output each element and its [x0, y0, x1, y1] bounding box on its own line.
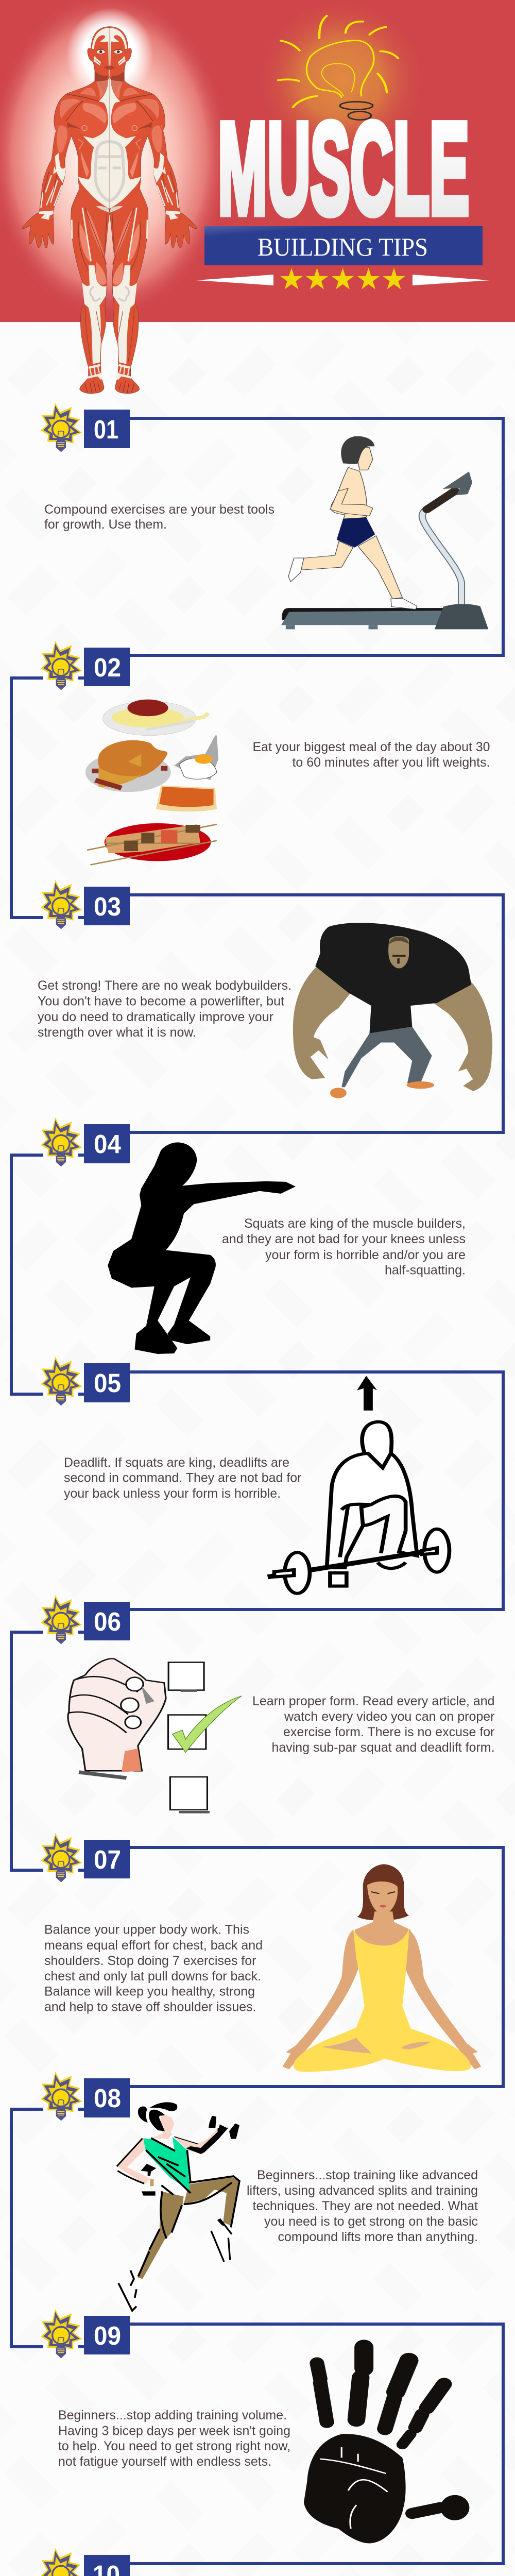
text: tip 06: [252, 1694, 494, 1755]
subtitle bar: BUILDING TIPS: [258, 232, 428, 261]
text: tip 07: and help to stave off shoulder issues.: [44, 2000, 256, 2014]
forearm lines: [41, 175, 62, 208]
number badge 06: 06: [94, 1607, 121, 1636]
text: tip 08: Beginners...stop training like advanced: [257, 2168, 478, 2182]
number badge 09: [84, 2316, 130, 2354]
panel: tip 04: [11, 1117, 466, 1394]
text: tip 09: [58, 2408, 290, 2469]
text: tip 03: [38, 978, 291, 1040]
number badge 03: [84, 887, 130, 925]
text: tip 03: you do need to dramatically improve your: [38, 1010, 273, 1024]
pectoral: [65, 101, 107, 138]
text: tip 01: Compound exercises are your best tools: [44, 502, 274, 517]
oblique: [81, 151, 89, 178]
text: tip 08: techniques. They are not needed. What: [252, 2199, 478, 2213]
text: tip 05: your back unless your form is horrible.: [64, 1486, 281, 1501]
number badge 05: 05: [94, 1368, 121, 1398]
number badge 10: [84, 2555, 130, 2576]
text: tip 08: [247, 2168, 478, 2244]
text: tip 06: having sub-par squat and deadlift form.: [272, 1740, 494, 1755]
arrow: up: [357, 1376, 377, 1411]
illustration: squat silhouette: [108, 1142, 296, 1354]
illustration: plates of food: [85, 700, 218, 865]
number badge 04: [84, 1124, 130, 1163]
illustration: hand ticking checklist: [68, 1658, 242, 1812]
ankle band: [88, 364, 102, 380]
text: tip 04: your form is horrible and/or you are: [265, 1248, 466, 1262]
knee: [82, 265, 107, 308]
number badge 02: [84, 648, 130, 686]
text: tip 02: Eat your biggest meal of the day about 30: [252, 740, 490, 754]
text: tip 04: [222, 1216, 466, 1278]
panel: tip 08: [11, 2072, 478, 2347]
illustration: giant muscular man: [293, 923, 492, 1098]
foot lines: [85, 381, 100, 393]
illustration: black hand print: [304, 2347, 469, 2543]
illustration: deadlift figure with arrow: [268, 1376, 449, 1594]
panel: tip 02: [11, 641, 490, 918]
number badge 01: 01: [94, 415, 118, 444]
text: tip 08: compound lifts more than anything.: [278, 2230, 478, 2244]
panel: tip 06: [11, 1595, 494, 1870]
thigh muscles: [79, 223, 91, 263]
text: tip 03: Get strong! There are no weak bodybuilders.: [38, 978, 291, 993]
text: tip 07: means equal effort for chest, back and: [44, 1938, 263, 1953]
illustration: runner on treadmill: [281, 436, 488, 629]
text: tip 07: shoulders. Stop doing 7 exercises for: [44, 1954, 256, 1968]
illustration: woman running with dumbbells: [117, 2102, 239, 2311]
text: tip 05: second in command. They are not bad for: [64, 1470, 302, 1485]
text: tip 09: Having 3 bicep days per week isn't going: [58, 2424, 290, 2438]
panel: tip 01: [41, 403, 503, 655]
panel: tip 05: [41, 1357, 503, 1609]
text: tip 03: You don't have to become a powerlifter, but: [38, 994, 284, 1009]
text: tip 06: Learn proper form. Read every article, and: [252, 1694, 494, 1708]
header banner: [0, 0, 515, 322]
shoulder highlights: [60, 99, 81, 118]
text: tip 09: not fatigue yourself with endless sets.: [58, 2454, 271, 2469]
icon: light bulb sketch: [278, 16, 398, 120]
abdominal outline: [95, 142, 110, 200]
number badge 07: [84, 1840, 130, 1878]
neck shading: [95, 71, 108, 93]
elbow tendon: [55, 153, 65, 183]
five star rating: [196, 268, 490, 290]
text: tip 01: [44, 502, 274, 532]
panel: tip 03: [38, 880, 503, 1132]
text: tip 05: Deadlift. If squats are king, deadlifts are: [64, 1455, 289, 1470]
text: tip 04: half-squatting.: [385, 1263, 466, 1278]
chest and torso tendon: [78, 77, 110, 209]
text: tip 02: to 60 minutes after you lift weights.: [293, 755, 490, 770]
panel: tip 10: [41, 2548, 469, 2576]
number badge 04: 04: [94, 1129, 122, 1159]
head pale cap: [92, 28, 110, 78]
number badge 05: [84, 1363, 130, 1402]
text: tip 05: [64, 1455, 302, 1501]
text: tip 08: you need is to get strong on the basic: [264, 2214, 478, 2229]
text: tip 02: [252, 740, 490, 770]
text: tip 07: chest and only lat pull downs for back.: [44, 1969, 261, 1984]
number badge 07: 07: [94, 1845, 121, 1874]
text: tip 03: strength over what it is now.: [38, 1025, 196, 1040]
text: tip 07: [44, 1923, 263, 2014]
text: tip 04: Squats are king of the muscle builders,: [244, 1216, 466, 1231]
number badge 08: 08: [94, 2083, 121, 2113]
panel: tip 09: [41, 2309, 503, 2564]
text: tip 04: and they are not bad for your knees unless: [222, 1232, 466, 1246]
wrist band: [39, 211, 53, 220]
text: tip 06: watch every video you can on proper: [284, 1709, 494, 1724]
text: tip 09: Beginners...stop adding training volume.: [58, 2408, 287, 2422]
subtitle bar: [204, 226, 483, 265]
text: tip 09: to help. You need to get strong right now,: [58, 2439, 290, 2453]
text: tip 08: lifters, using advanced splits and training: [247, 2183, 478, 2198]
title block: [196, 16, 490, 290]
number badge 06: [84, 1602, 130, 1640]
text: tip 06: exercise form. There is no excuse for: [283, 1725, 494, 1739]
illustration: muscle anatomy figure: [22, 27, 197, 394]
number badge 09: 09: [94, 2321, 121, 2350]
text: tip 01: for growth. Use them.: [44, 517, 167, 532]
number badge 01: [84, 410, 130, 448]
face details: [94, 56, 101, 65]
illustration: meditating woman: [282, 1864, 481, 2072]
biceps: [57, 125, 67, 153]
text: tip 07: Balance your upper body work. This: [44, 1923, 249, 1937]
number badge 08: [84, 2078, 130, 2117]
shin: [89, 306, 101, 364]
number badge 02: 02: [94, 653, 121, 682]
text: tip 07: Balance will keep you healthy, strong: [44, 1985, 255, 1999]
panel: tip 07: [41, 1833, 503, 2087]
number badge 03: 03: [94, 892, 121, 921]
